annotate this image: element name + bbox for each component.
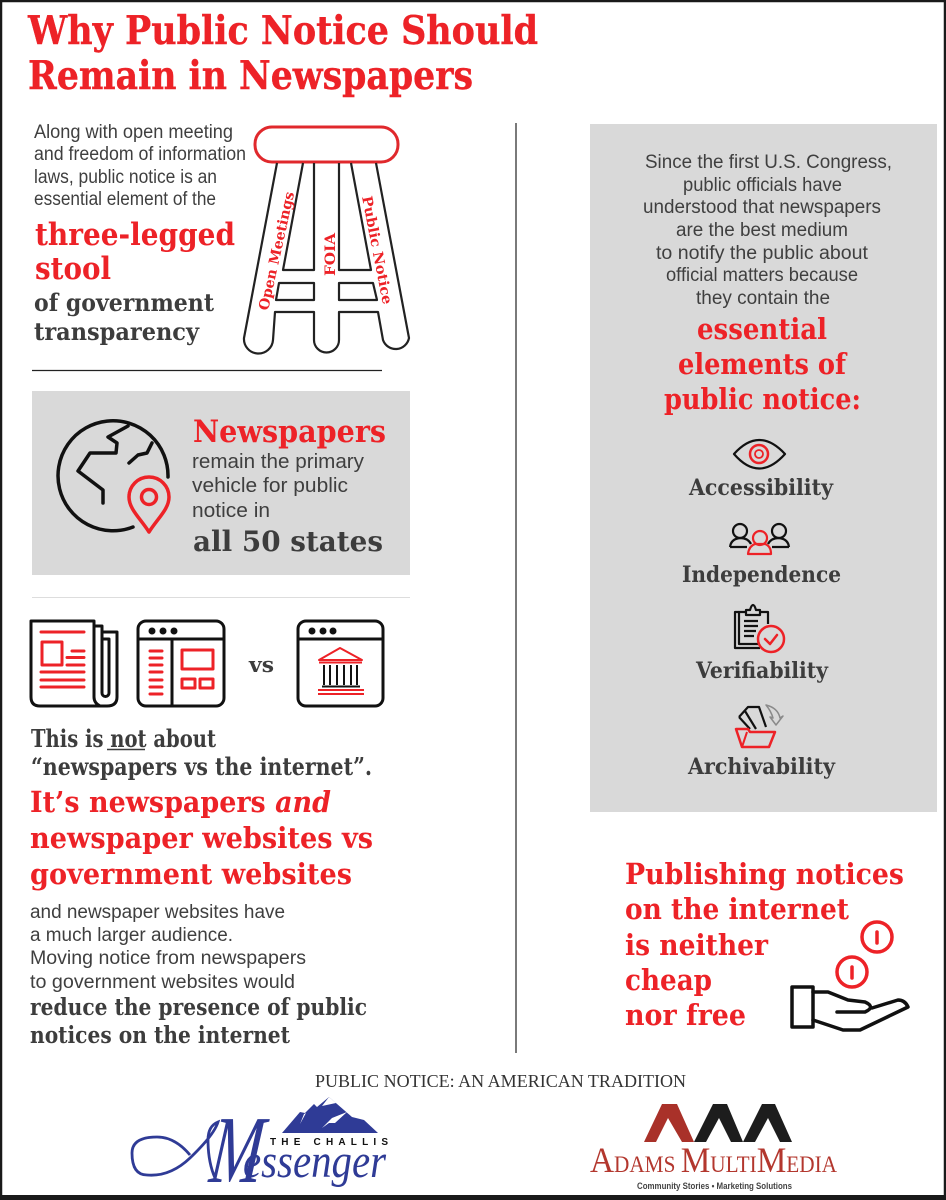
- icon: government website: [298, 621, 383, 706]
- icon: hand with coins: [792, 922, 908, 1030]
- text block: primary vehicle: notice in: [192, 500, 270, 522]
- text block: reduce the presence: reduce the presence of public: [30, 994, 367, 1021]
- text block: stool intro: Along with open meeting: [34, 122, 233, 143]
- heading: three-legged stool: stool: [35, 251, 111, 287]
- callout: publishing notices: nor free: [625, 998, 746, 1032]
- text block: larger audience: Moving notice from newspapers: [30, 948, 306, 969]
- logo: The Challis Messenger: essenger: [243, 1135, 386, 1188]
- icon: stool: Public Notice: [358, 195, 395, 306]
- icon: stool: [244, 127, 409, 354]
- logo: Adams MultiMedia: Community Stories • Marketing Solutions: [637, 1181, 792, 1191]
- icon: archive folder: [736, 705, 783, 747]
- text block: larger audience: and newspaper websites have: [30, 902, 285, 923]
- callout: publishing notices: Publishing notices: [625, 857, 904, 891]
- text block: not about newspapers vs the internet: [31, 724, 372, 781]
- icon: stool: Open Meetings: [256, 190, 298, 312]
- heading: newspapers and newspaper websites vs government websites: government websites: [30, 857, 352, 891]
- text block: since the first U.S. Congress: [643, 152, 892, 309]
- text block: since the first U.S. Congress: Since the first U.S. Congress,: [645, 152, 892, 173]
- label: Independence: Independence: [682, 562, 841, 588]
- footer heading: PUBLIC NOTICE: AN AMERICAN TRADITION: [315, 1071, 686, 1091]
- logo: Adams MultiMedia: [590, 1104, 837, 1191]
- heading: newspapers and newspaper websites vs government websites: newspaper websites vs: [30, 821, 373, 855]
- icon: stool: FOIA: [323, 232, 339, 276]
- heading: essential elements of public notice: public notice:: [664, 382, 861, 416]
- text block: stool intro: essential element of the: [34, 189, 216, 210]
- text: all 50 states: all 50 states: [193, 525, 383, 558]
- text block: stool intro: laws, public notice is an: [34, 167, 217, 188]
- text block: reduce the presence: notices on the internet: [30, 1022, 290, 1049]
- text block: reduce the presence: [30, 994, 367, 1049]
- panel: three-legged stool: [34, 122, 409, 354]
- text block: since the first U.S. Congress: they contain the: [696, 288, 830, 309]
- icon: globe with location pin: [58, 421, 169, 532]
- text: vs: vs: [248, 652, 274, 677]
- panel: newspapers in all 50 states: [32, 391, 410, 575]
- logo: The Challis Messenger: THE CHALLIS: [270, 1137, 388, 1148]
- text block: since the first U.S. Congress: are the best medium: [676, 220, 848, 241]
- text block: larger audience: to government websites would: [30, 972, 295, 993]
- text block: of government transparency: of government: [34, 288, 214, 317]
- icon: newspaper website: [138, 621, 224, 706]
- text block: not about newspapers vs the internet: This is not about: [31, 724, 216, 753]
- text block: since the first U.S. Congress: understood that newspapers: [643, 197, 881, 218]
- text block: primary vehicle: [192, 451, 364, 522]
- callout: publishing notices: on the internet: [625, 892, 850, 926]
- icon: people: [730, 524, 789, 554]
- text block: since the first U.S. Congress: official matters because: [666, 265, 858, 286]
- title: [27, 8, 538, 99]
- title: Why Public Notice Should: [27, 8, 538, 54]
- heading: newspapers and newspaper websites vs government websites: [30, 785, 373, 891]
- title: Remain in Newspapers: [28, 53, 473, 99]
- callout: publishing notices: is neither: [625, 928, 769, 962]
- text block: larger audience: a much larger audience.: [30, 925, 233, 946]
- logo: The Challis Messenger: [132, 1097, 388, 1200]
- panel: essential elements: [590, 124, 937, 812]
- label: Archivability: Archivability: [687, 754, 836, 780]
- text block: stool intro: and freedom of information: [34, 144, 246, 165]
- text block: primary vehicle: remain the primary: [192, 451, 364, 473]
- label: Verifiability: Verifiability: [695, 658, 829, 684]
- text block: since the first U.S. Congress: public officials have: [683, 175, 842, 196]
- logo: Adams MultiMedia: ADAMS MULTIMEDIA: [590, 1140, 837, 1180]
- heading: Newspapers: Newspapers: [193, 414, 386, 450]
- heading: three-legged stool: [35, 217, 235, 287]
- text block: of government transparency: [34, 288, 214, 346]
- text block: stool intro: [34, 122, 246, 210]
- callout: publishing notices: cheap: [625, 963, 712, 997]
- icon: newspaper: [31, 621, 117, 706]
- text block: of government transparency: transparency: [34, 317, 200, 346]
- text block: larger audience: [30, 902, 306, 993]
- text block: primary vehicle: vehicle for public: [192, 475, 348, 497]
- icon: clipboard check: [735, 605, 784, 652]
- heading: essential elements of public notice: essential: [697, 312, 827, 346]
- heading: three-legged stool: three-legged: [35, 217, 235, 253]
- heading: essential elements of public notice: [664, 312, 861, 416]
- callout: publishing notices: [625, 857, 904, 1032]
- heading: essential elements of public notice: elements of: [678, 347, 848, 381]
- heading: newspapers and newspaper websites vs government websites: It’s newspapers and: [30, 785, 331, 819]
- text block: not about newspapers vs the internet: “newspapers vs the internet”.: [31, 752, 372, 781]
- label: Accessibility: Accessibility: [688, 475, 834, 501]
- text block: since the first U.S. Congress: to notify the public about: [656, 243, 869, 264]
- icon: eye: [734, 440, 785, 468]
